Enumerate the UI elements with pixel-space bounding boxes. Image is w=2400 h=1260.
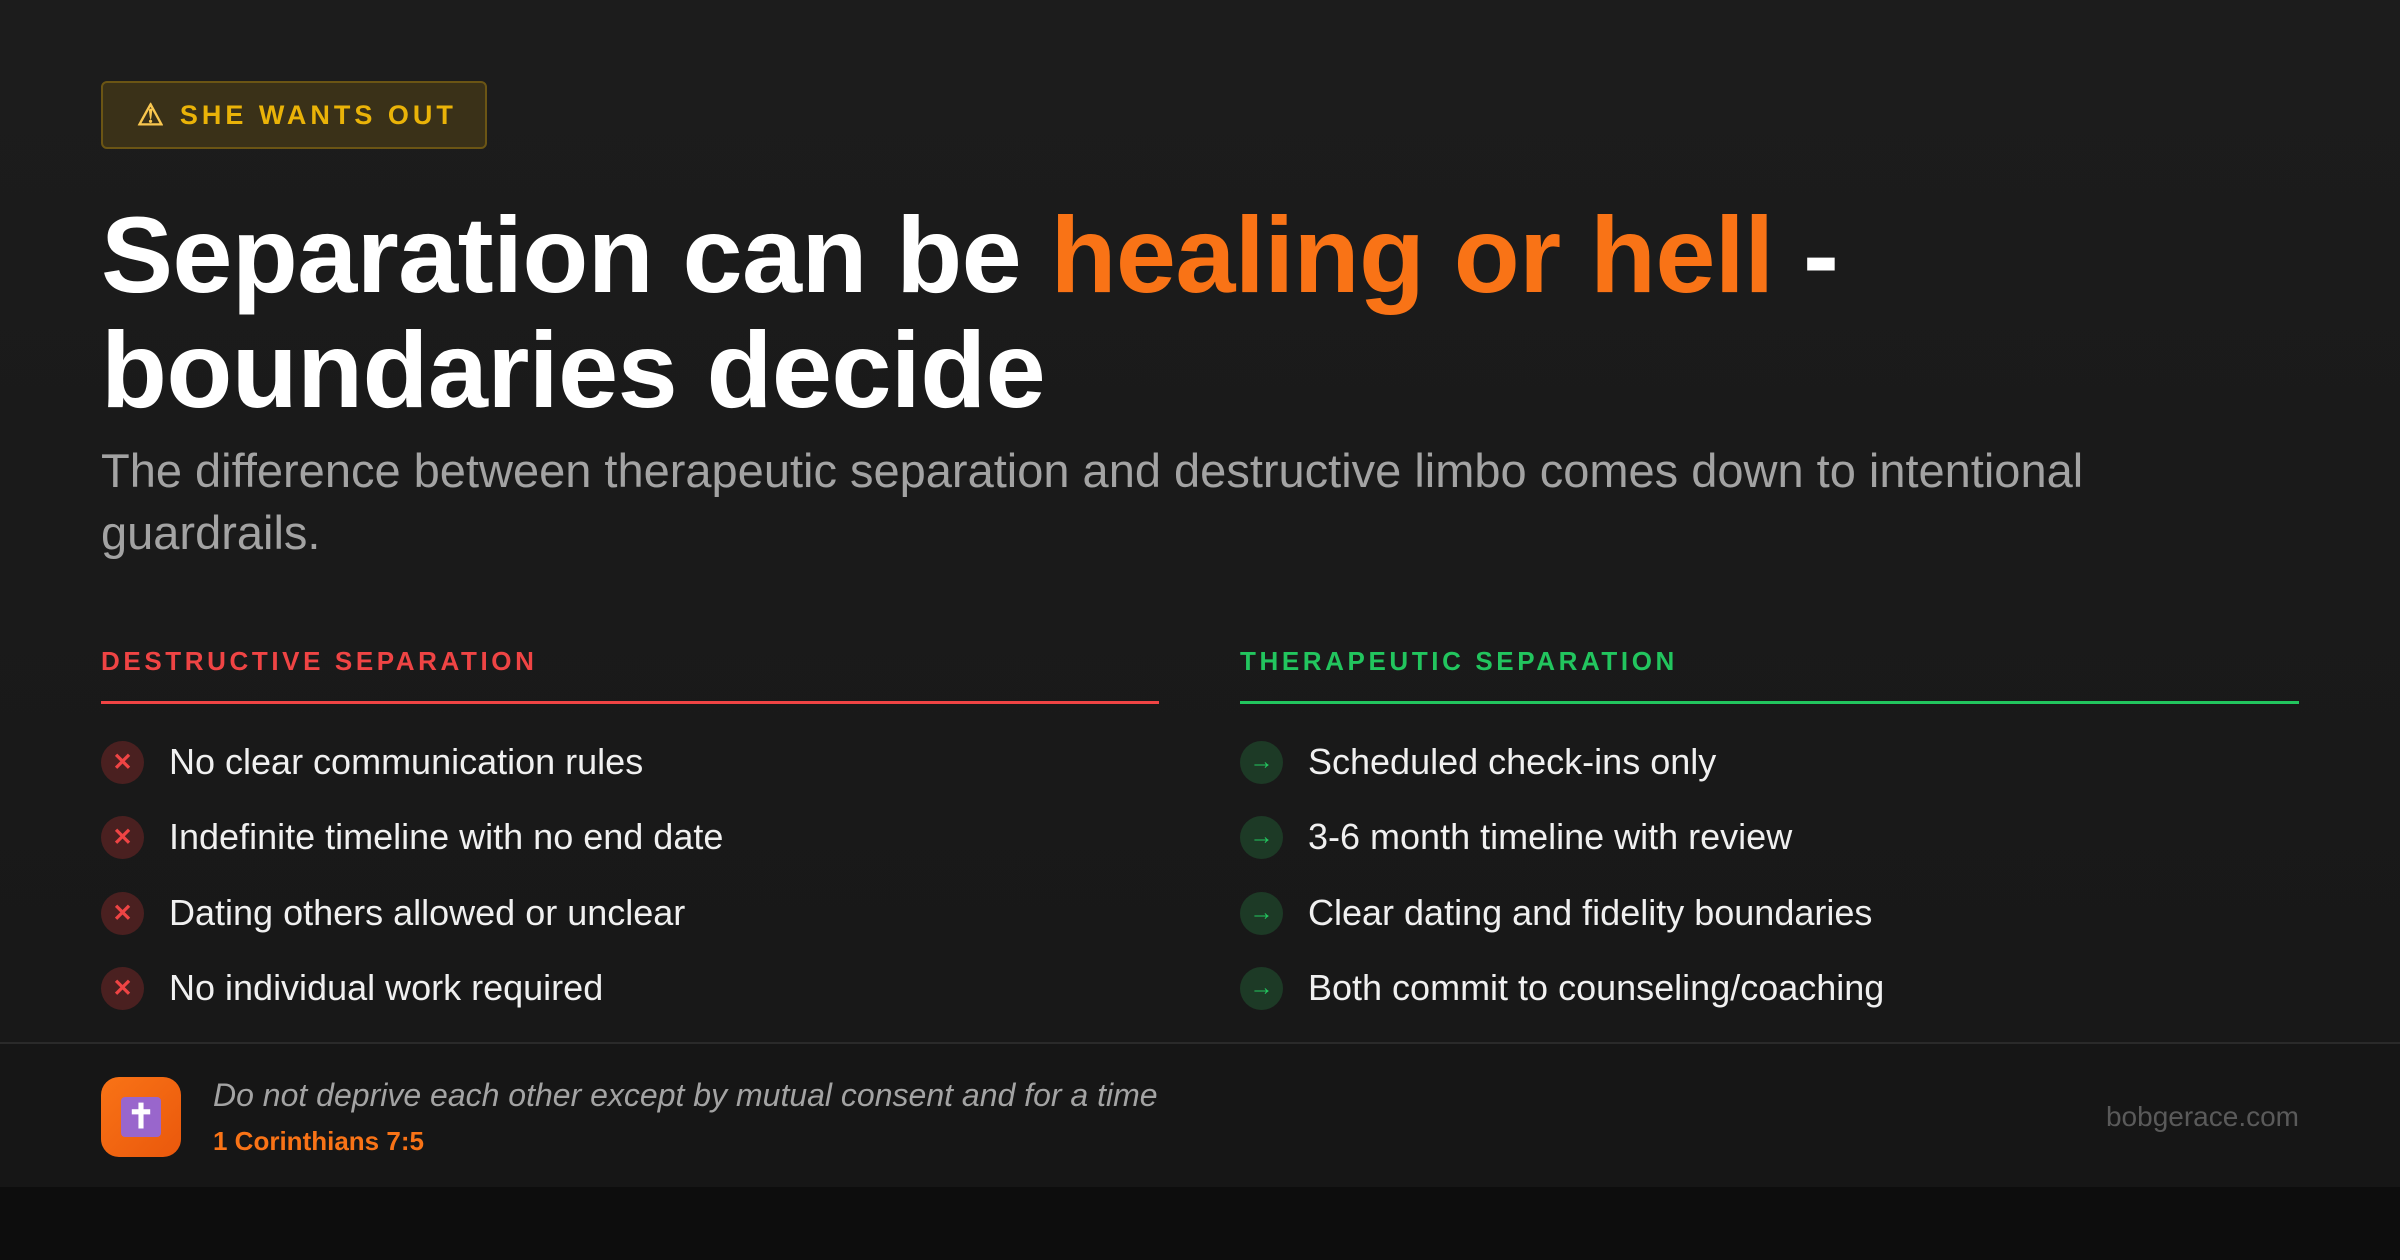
item: → — [1250, 974, 1274, 1001]
title: boundaries decide — [101, 309, 1045, 430]
item: No clear communication rules — [169, 741, 643, 782]
icon: cross — [101, 1077, 181, 1157]
item: ✕ — [112, 974, 133, 1002]
title: Separation can be healing or hell - — [101, 194, 1838, 315]
icon: warning: ⚠ — [137, 98, 164, 132]
item: Both commit to counseling/coaching — [1308, 967, 1884, 1008]
website: bobgerace.com — [2106, 1101, 2299, 1132]
item: Indefinite timeline with no end date — [169, 816, 723, 857]
item: 3-6 month timeline with review — [1308, 816, 1792, 857]
item: Scheduled check-ins only — [1308, 741, 1716, 782]
item: ✕ — [112, 900, 133, 926]
item: → — [1250, 899, 1274, 926]
item: → — [1250, 748, 1274, 775]
item: Dating others allowed or unclear — [169, 892, 685, 933]
item: Clear dating and fidelity boundaries — [1308, 892, 1872, 933]
heading: destructive: DESTRUCTIVE SEPARATION — [101, 646, 537, 676]
item: ✕ — [112, 824, 133, 850]
item: → — [1250, 823, 1274, 850]
subtitle: The difference between therapeutic separation and destructive limbo comes down to intentional guardrails. — [101, 444, 2083, 559]
panel: destructive — [101, 646, 1159, 1010]
badge: SHE WANTS OUT — [180, 100, 457, 130]
icon: cross: ✝ — [127, 1098, 155, 1136]
panel: therapeutic — [1240, 646, 2299, 1010]
heading: therapeutic: THERAPEUTIC SEPARATION — [1240, 646, 1678, 676]
item: No individual work required — [169, 967, 603, 1008]
quote: Do not deprive each other except by mutual consent and for a time — [213, 1077, 1158, 1113]
reference: 1 Corinthians 7:5 — [213, 1126, 424, 1156]
item: ✕ — [112, 748, 133, 776]
title — [101, 194, 1838, 430]
badge — [101, 81, 487, 149]
footer — [0, 1042, 2400, 1187]
